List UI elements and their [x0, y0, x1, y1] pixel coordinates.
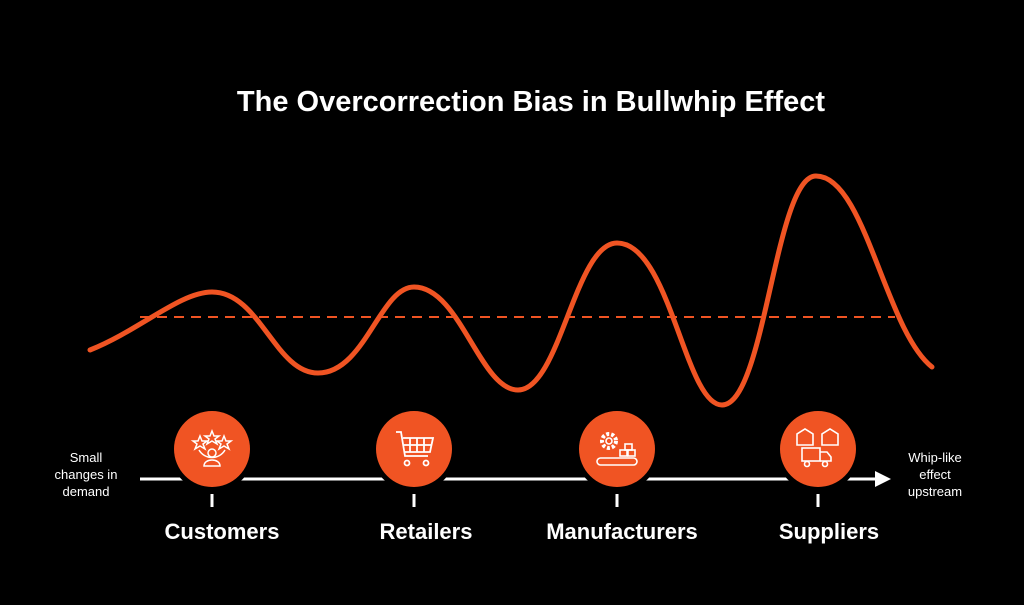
right text: upstream [908, 484, 962, 499]
title: The Overcorrection Bias in Bullwhip Effect [237, 86, 825, 118]
node: customers: Customers [165, 519, 279, 544]
icon: cart [396, 432, 433, 466]
node: manufacturers [546, 406, 698, 544]
left text: changes in [55, 467, 117, 482]
left text: demand [63, 484, 109, 499]
right text: effect [919, 467, 951, 482]
icon: gear and conveyor [597, 434, 637, 465]
node: retailers: Retailers [380, 519, 472, 544]
node: manufacturers: Manufacturers [546, 519, 698, 544]
bullwhip curve [90, 176, 932, 405]
left text: Small [70, 450, 102, 465]
dashed average line [140, 316, 895, 318]
timeline arrow [140, 471, 891, 487]
node: retailers [371, 406, 472, 544]
icon: customer stars [193, 431, 231, 466]
node: customers [165, 406, 279, 544]
node: suppliers [775, 406, 879, 544]
right text: Whip-like [908, 450, 962, 465]
node: suppliers: Suppliers [779, 519, 879, 544]
icon: warehouses and truck [797, 429, 838, 466]
